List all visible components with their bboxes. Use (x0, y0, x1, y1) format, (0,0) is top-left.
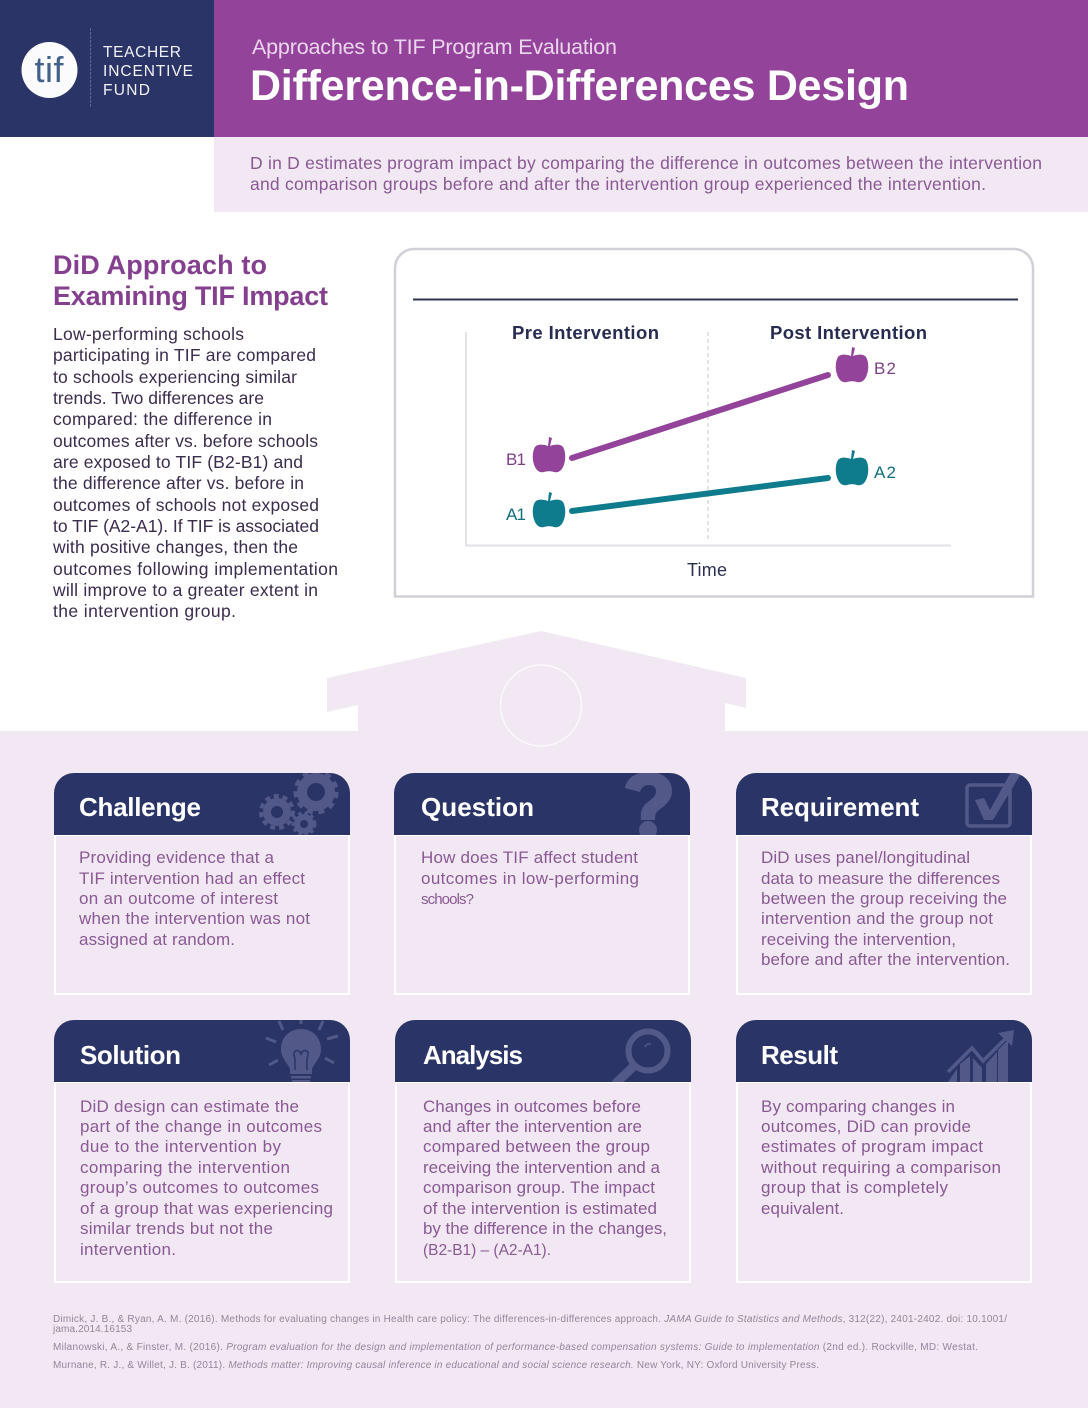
card: result (736, 1020, 1032, 1282)
card: analysis: by the difference in the changes, (423, 1219, 667, 1238)
card: solution: part of the change in outcomes (80, 1117, 322, 1136)
intro band: and comparison groups before and after the intervention group experienced the intervention. (250, 174, 986, 194)
card: solution: intervention. (80, 1240, 176, 1259)
card: challenge: on an outcome of interest (79, 889, 278, 908)
card: analysis: compared between the group (423, 1137, 650, 1156)
period labels: Post Intervention (770, 322, 927, 343)
section heading (53, 250, 328, 311)
logo panel (0, 0, 214, 137)
card: challenge: assigned at random. (79, 930, 235, 949)
card: analysis: of the intervention is estimated (423, 1199, 657, 1218)
card: result: Result (761, 1040, 838, 1070)
card: result: group that is completely (761, 1178, 948, 1197)
logo panel: tif (34, 49, 64, 90)
card: analysis: Changes in outcomes before (423, 1097, 641, 1116)
point labels: A2 (874, 463, 896, 482)
apple B2 (836, 347, 868, 382)
schoolhouse shape (327, 631, 746, 746)
explanatory text: outcomes after vs. before schools (53, 431, 318, 451)
card: question: Question (421, 792, 534, 822)
icon: rising chart (948, 1030, 1014, 1082)
logo panel: FUND (103, 82, 150, 99)
card: challenge: Challenge (79, 792, 201, 822)
point labels: B1 (506, 450, 526, 469)
icon: gears (261, 772, 336, 835)
explanatory text: to TIF (A2-A1). If TIF is associated (53, 516, 319, 536)
title banner: Approaches to TIF Program Evaluation (252, 35, 617, 59)
card: solution: due to the intervention by (80, 1137, 282, 1156)
explanatory text: trends. Two differences are (53, 388, 264, 408)
logo panel: TEACHER (103, 44, 181, 61)
card: result: outcomes, DiD can provide (761, 1117, 971, 1136)
intro band: D in D estimates program impact by comparing the difference in outcomes between the intervention (250, 153, 1042, 173)
trend line: intervention (572, 375, 828, 458)
card: requirement: intervention and the group not (761, 909, 993, 928)
card: analysis: (B2-B1) – (A2-A1). (423, 1242, 551, 1259)
card: requirement: between the group receiving the (761, 889, 1007, 908)
card: question: outcomes in low-performing (421, 869, 639, 888)
card: solution: similar trends but not the (80, 1219, 273, 1238)
explanatory text: with positive changes, then the (52, 537, 298, 557)
card: analysis: and after the intervention are (423, 1117, 642, 1136)
card: solution: DiD design can estimate the (80, 1097, 299, 1116)
card: challenge (54, 772, 350, 994)
card: requirement: receiving the intervention, (761, 930, 956, 949)
explanatory text: are exposed to TIF (B2-B1) and (53, 452, 303, 472)
explanatory text: outcomes of schools not exposed (53, 495, 319, 515)
references: Murnane, R. J., & Willet, J. B. (2011). Methods matter: Improving causal inference in educational and social science research. New York, NY: Oxford University Press. (53, 1360, 819, 1371)
axis label: Time (687, 560, 727, 580)
explanatory text: outcomes following implementation (53, 559, 338, 579)
axes (466, 332, 951, 546)
card: analysis (395, 1020, 691, 1282)
card: analysis: comparison group. The impact (423, 1178, 655, 1197)
explanatory text: Low-performing schools (53, 324, 244, 344)
explanatory text: the difference after vs. before in (53, 473, 304, 493)
references: Milanowski, A., & Finster, M. (2016). Program evaluation for the design and implementation of performance-based compensation systems: Guide to implementation (2nd ed.). Rockville, MD: Westat. (53, 1342, 978, 1353)
title banner: Difference-in-Differences Design (250, 62, 909, 110)
card: solution: Solution (80, 1040, 181, 1070)
card: solution: group’s outcomes to outcomes (80, 1178, 319, 1197)
explanatory text: participating in TIF are compared (53, 345, 316, 365)
title banner (214, 0, 1088, 137)
section heading: DiD Approach to (53, 250, 267, 280)
references (52, 1314, 1007, 1371)
card: analysis: receiving the intervention and a (423, 1158, 661, 1177)
card: solution: comparing the intervention (80, 1158, 290, 1177)
card: requirement: data to measure the differences (761, 869, 1000, 888)
apple A1 (533, 492, 565, 527)
point labels: B2 (874, 359, 896, 378)
icon: magnifying glass (615, 1032, 668, 1084)
card: result: estimates of program impact (761, 1137, 983, 1156)
card: result: without requiring a comparison (760, 1158, 1001, 1177)
card: challenge: when the intervention was not (78, 909, 310, 928)
point labels (506, 359, 896, 524)
intro band (214, 137, 1088, 212)
card: requirement (736, 772, 1032, 994)
card: requirement: before and after the intervention. (761, 950, 1010, 969)
references: jama.2014.16153 (52, 1324, 132, 1335)
card: question: How does TIF affect student (421, 848, 638, 867)
apple A2 (836, 450, 868, 485)
explanatory text: to schools experiencing similar (53, 367, 297, 387)
card: question (394, 772, 690, 994)
card: analysis: Analysis (423, 1040, 523, 1070)
explanatory text (52, 324, 338, 621)
explanatory text: compared: the difference in (53, 409, 272, 429)
icon: light bulb (266, 1018, 338, 1082)
explanatory text: will improve to a greater extent in (52, 580, 318, 600)
card: solution: of a group that was experiencing (80, 1199, 333, 1218)
logo panel: INCENTIVE (103, 63, 193, 80)
point labels: A1 (506, 505, 526, 524)
period labels: Pre Intervention (512, 322, 659, 343)
card: question: schools? (421, 891, 474, 908)
card: challenge: TIF intervention had an effect (79, 869, 305, 888)
icon: checkbox (967, 772, 1022, 826)
lower background (0, 731, 1088, 1408)
trend line: comparison (572, 478, 828, 511)
explanatory text: the intervention group. (53, 601, 236, 621)
period labels (512, 322, 927, 343)
card: requirement: DiD uses panel/longitudinal (761, 848, 970, 867)
card: solution (54, 1018, 350, 1282)
chart panel (395, 249, 1033, 596)
card: result: By comparing changes in (761, 1097, 955, 1116)
apple B1 (533, 437, 565, 472)
card: challenge: Providing evidence that a (79, 848, 275, 867)
card: requirement: Requirement (761, 792, 919, 822)
card: result: equivalent. (761, 1199, 844, 1218)
references: Dimick, J. B., & Ryan, A. M. (2016). Methods for evaluating changes in Health care policy: The differences-in-differences approach. JAMA Guide to Statistics and Methods, 312(22), 2401-2402. doi: 10.1001/ (53, 1314, 1007, 1325)
icon: question mark (625, 772, 672, 839)
section heading: Examining TIF Impact (53, 281, 328, 311)
